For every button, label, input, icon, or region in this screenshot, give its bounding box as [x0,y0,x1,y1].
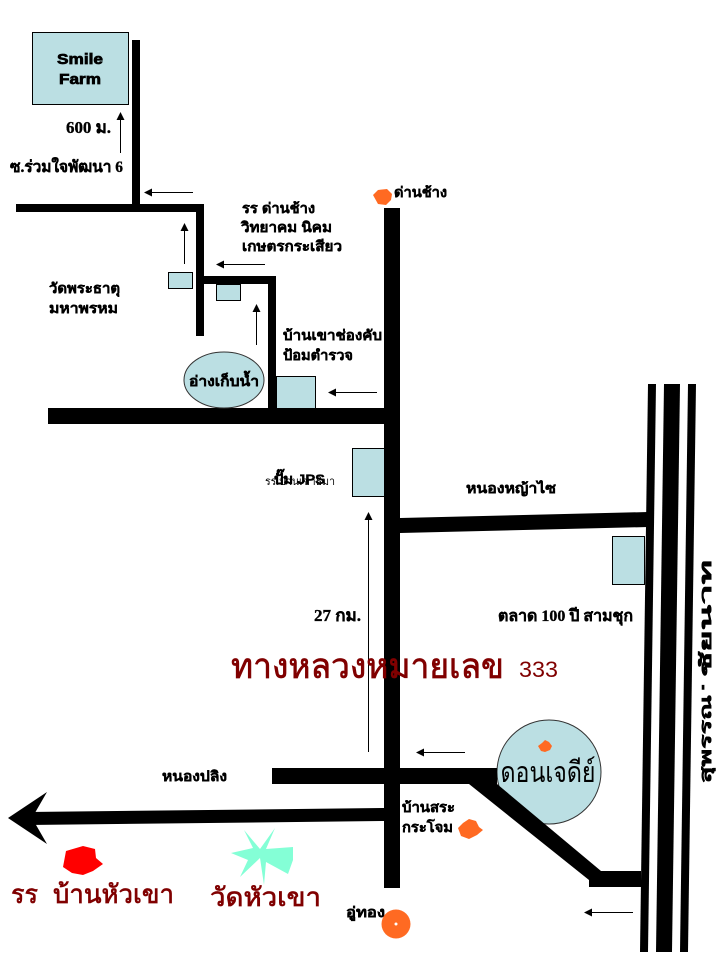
labels: mid right: หนองหญ้าไซ [466,479,557,497]
building: Smile Farm: Smile [57,51,103,68]
triple parallel highway [640,384,696,952]
labels: Dan Chang town with marker: ด่านช้าง [394,184,447,200]
labels: school: วิทยาคม นิคม [240,219,332,235]
labels: mid right: ตลาด 100 ปี สามชุก [498,606,633,626]
building: small blue boxes and police post [168,272,644,584]
label: Ban Hua Khao school: รร [11,880,38,909]
labels: lower: อู่ทอง [346,904,385,921]
labels: upper left [10,118,123,316]
marker: Wat Hua Khao [231,828,293,885]
labels: police post [283,327,382,363]
labels: mid right [314,479,633,626]
vertical highway label: ชัยนาท [697,560,715,677]
labels: upper left: 600 ม. [66,118,111,137]
labels: school: เกษตรกระเสียว [242,238,342,254]
labels: lower: หนองปลิง [162,768,227,784]
reservoir ellipse [184,352,264,408]
marker: U Thong [382,910,410,938]
labels: lower: บ้านสระ [402,799,455,815]
highway title: 333 [519,657,558,682]
label: Ban Hua Khao school: บ้านหัวเขา [53,880,174,909]
building: Smile Farm: Farm [59,71,101,88]
vertical highway label [694,560,716,783]
marker: Ban Hua Khao school [63,846,103,875]
labels: overlapping PTT and school text [265,468,335,488]
labels: overlapping PTT and school text: รร.บ้านเขาธิมา [265,476,335,488]
vertical highway label: - [694,685,711,690]
labels: upper left: ซ.ร่วมใจพัฒนา 6 [10,157,123,176]
marker: Ban Sa Krachom [458,819,483,839]
building: Smile Farm [32,32,128,104]
labels: overlapping PTT and school text: ปั๊ม JPS [274,468,325,487]
direction arrows [120,113,633,912]
vertical highway label: สุพรรณ [698,695,716,783]
labels: lower [162,768,455,921]
labels: lower: กระโจม [402,818,453,835]
road network: main highway 333 and side roads [8,208,648,888]
road network: upper branch roads [16,40,400,424]
marker: Don Chedi [538,740,552,752]
labels: Dan Chang town with marker [373,184,447,205]
label: Wat Hua Khao: วัดหัวเขา [210,883,321,912]
labels: upper left: วัดพระธาตุ [49,280,120,297]
labels: school: รร ด่านช้าง [242,200,315,216]
Don Chedi circle: ดอนเจดีย์ [500,756,596,789]
highway title: ทางหลวงหมายเลข [231,647,504,686]
labels: upper left: มหาพรหม [49,300,118,316]
labels: police post: ป้อมตำรวจ [283,347,353,363]
labels: mid right: 27 กม. [314,606,361,625]
Don Chedi circle [497,720,601,824]
labels: school [240,200,342,254]
labels: police post: บ้านเขาช่องคับ [283,327,382,343]
reservoir ellipse: อ่างเก็บน้ำ [189,370,259,389]
